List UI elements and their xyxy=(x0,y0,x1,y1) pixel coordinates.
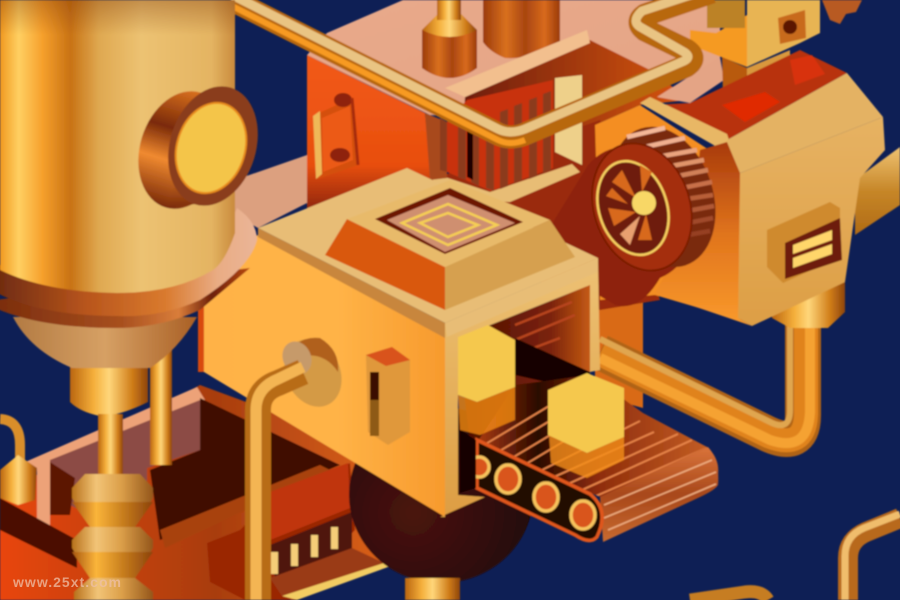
wrap highlights xyxy=(604,460,716,530)
hexagon cube front xyxy=(548,373,624,453)
belt stripes xyxy=(486,404,706,497)
platform floor xyxy=(0,385,430,600)
back shaft xyxy=(425,113,447,180)
switch box xyxy=(366,347,410,445)
bead 2 xyxy=(72,527,153,578)
small left pipe and cap xyxy=(0,419,37,505)
pyramid plateau xyxy=(347,180,550,267)
belt side plate xyxy=(477,440,602,541)
conveyor belt top xyxy=(478,375,718,497)
conveyor xyxy=(458,325,718,542)
elbow pipe on box xyxy=(256,367,303,600)
upper platform xyxy=(235,0,740,320)
flange side xyxy=(0,268,250,328)
hub xyxy=(632,191,656,215)
rear thin pipe xyxy=(150,350,172,465)
recess lit edge xyxy=(445,30,590,97)
top face xyxy=(258,168,598,323)
port on left face xyxy=(313,93,358,179)
pyramid left slope xyxy=(325,219,445,310)
flange on box xyxy=(274,330,352,416)
column xyxy=(70,367,148,416)
red edge beside box xyxy=(198,300,206,372)
column with beads xyxy=(70,367,153,600)
right machine xyxy=(640,0,885,326)
cylinder stubs on platform xyxy=(422,0,560,78)
recess wall xyxy=(50,400,200,515)
fan blades xyxy=(606,165,652,245)
sphere under box xyxy=(349,407,533,583)
pyramid right slope xyxy=(445,220,575,310)
wheel face xyxy=(576,130,708,284)
bracket xyxy=(460,430,476,493)
bead 1 xyxy=(72,474,153,527)
gold strip behind xyxy=(640,97,740,173)
cylinder body xyxy=(0,0,235,293)
hexagon cube back xyxy=(458,325,515,402)
bead 3 xyxy=(74,578,153,600)
central box xyxy=(198,168,718,600)
column xyxy=(690,0,820,100)
machine body xyxy=(738,117,885,326)
bevel strip xyxy=(258,228,445,338)
pipes: lower right corner xyxy=(690,514,900,600)
chip xyxy=(207,463,388,600)
plaque xyxy=(767,202,842,283)
top tray xyxy=(650,50,847,140)
flange top xyxy=(0,208,257,316)
pipe: right horizontal xyxy=(855,147,900,235)
lower stem xyxy=(405,578,460,600)
machine side xyxy=(655,142,752,326)
lip on dark block xyxy=(160,465,330,548)
cog xyxy=(822,0,862,24)
port disc xyxy=(165,94,257,202)
cylinder top shade xyxy=(0,0,235,35)
port ring xyxy=(154,75,272,217)
platform top xyxy=(307,0,720,125)
orange column behind box xyxy=(595,270,643,408)
inner square frame xyxy=(375,188,523,254)
opening interior xyxy=(458,285,590,445)
orange wall xyxy=(595,105,740,320)
right frame xyxy=(440,258,600,517)
dark red base under wheel xyxy=(430,120,660,310)
toothed drum xyxy=(593,113,733,281)
belt casing xyxy=(553,147,690,306)
pink rim xyxy=(0,387,205,535)
nested diamonds xyxy=(402,204,497,245)
wheel and belt xyxy=(553,113,733,306)
big cylinder xyxy=(0,0,272,368)
collar under right machine xyxy=(772,280,845,328)
pink panel behind column xyxy=(657,57,724,103)
grille xyxy=(440,80,553,191)
yellow block xyxy=(555,75,582,165)
copper crossing pipe xyxy=(232,0,712,143)
belt wrap xyxy=(600,447,718,542)
recess shadow xyxy=(50,462,75,515)
left face xyxy=(204,235,445,517)
port side xyxy=(124,80,242,220)
lower platform xyxy=(0,385,430,600)
top rim strip xyxy=(445,258,598,337)
inner square pink xyxy=(387,195,515,252)
dark block xyxy=(150,398,340,540)
reflection cube back xyxy=(458,387,515,435)
pipe: lower elbow xyxy=(600,310,810,443)
recess channel xyxy=(460,40,690,180)
watermark: www.25xt.com xyxy=(12,574,121,590)
cone xyxy=(13,317,197,368)
machine top xyxy=(727,73,883,173)
floor strip under grille xyxy=(430,164,580,202)
rollers xyxy=(469,457,595,529)
platform left face xyxy=(307,55,432,212)
stem xyxy=(98,414,123,480)
black band xyxy=(515,338,590,392)
maroon left panel xyxy=(0,498,77,568)
reflection cube front xyxy=(549,435,624,478)
pink wedge near flange xyxy=(235,155,307,228)
